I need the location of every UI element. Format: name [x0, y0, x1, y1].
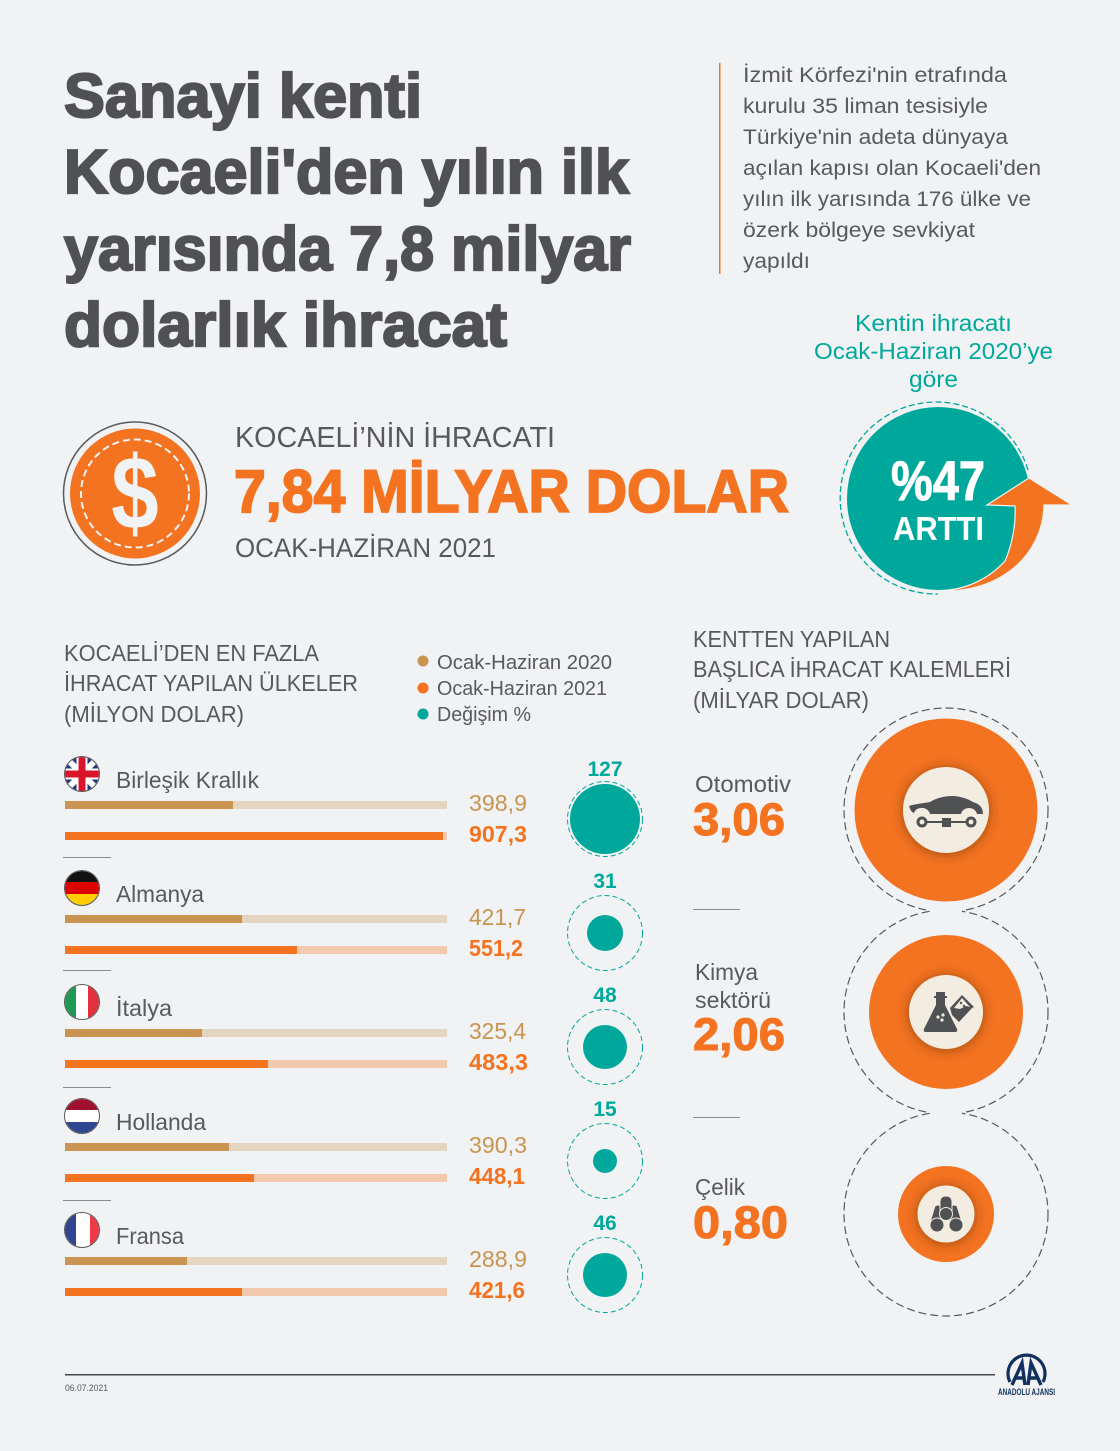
title: dolarlık ihracat: [64, 291, 507, 360]
icon: dollar coin: $: [111, 436, 159, 552]
item: Otomotiv: 3,06: [693, 794, 785, 845]
intro paragraph: İzmit Körfezi'nin etrafında: [743, 63, 1007, 87]
row: Fransa: [64, 1212, 642, 1312]
icon: Italian flag: [64, 984, 100, 1020]
item: Kimya sektörü: sektörü: [695, 987, 771, 1013]
icon: dollar coin: [64, 422, 206, 565]
row: Almanya: Almanya: [116, 881, 205, 907]
intro paragraph: yapıldı: [743, 249, 810, 273]
heading: export items: (MİLYAR DOLAR): [693, 687, 869, 713]
title: Kocaeli'den yılın ilk: [64, 138, 629, 207]
icon: French flag: [64, 1212, 100, 1248]
row: Birleşik Krallık: [64, 756, 642, 856]
icon: flask: [924, 992, 974, 1032]
callout: change caption: [814, 310, 1053, 392]
callout: change caption: Kentin ihracatı: [855, 310, 1012, 336]
intro paragraph: [719, 63, 1041, 274]
row: İtalya: [64, 984, 642, 1084]
intro paragraph: kurulu 35 liman tesisiyle: [743, 94, 988, 118]
intro paragraph: özerk bölgeye sevkiyat: [743, 218, 975, 242]
row: Almanya: 421,7: [469, 904, 526, 930]
icon: car: [909, 796, 983, 827]
icon: UK flag: [64, 756, 100, 792]
headline export figure: KOCAELİ’NİN İHRACATI: [235, 421, 555, 454]
icon: Dutch flag: [64, 1098, 100, 1134]
callout: change caption: Ocak-Haziran 2020’ye: [814, 338, 1053, 364]
intro paragraph: açılan kapısı olan Kocaeli'den: [743, 156, 1041, 180]
row: Hollanda: 15: [593, 1098, 617, 1121]
heading: countries: [64, 640, 358, 727]
row: İtalya: 325,4: [469, 1018, 526, 1044]
row: Birleşik Krallık: 907,3: [469, 821, 527, 847]
footer rule: [65, 1374, 995, 1376]
row: İtalya: İtalya: [116, 995, 173, 1021]
legend: Değişim %: [437, 703, 531, 726]
item: Kimya sektörü: Kimya: [695, 959, 759, 985]
intro paragraph: Türkiye'nin adeta dünyaya: [743, 125, 1008, 149]
item: Çelik: [693, 1166, 994, 1262]
row: Hollanda: Hollanda: [116, 1109, 207, 1135]
callout: 47 percent increase circle: [840, 402, 1072, 594]
heading: export items: KENTTEN YAPILAN: [693, 626, 890, 652]
callout: 47 percent increase circle: ARTTI: [893, 510, 984, 547]
row: Fransa: Fransa: [116, 1223, 185, 1249]
item: Otomotiv: Otomotiv: [695, 771, 791, 797]
item: Kimya sektörü: 2,06: [693, 1009, 785, 1060]
legend: Ocak-Haziran 2021: [437, 677, 607, 700]
row: Fransa: 46: [593, 1212, 617, 1235]
legend: [418, 651, 612, 726]
callout: 47 percent increase circle: %47: [891, 449, 985, 512]
callout: change caption: göre: [909, 366, 958, 392]
icon: steel pipes: [930, 1196, 963, 1232]
item: Kimya sektörü: [693, 935, 1023, 1089]
row: Almanya: [64, 870, 642, 970]
heading: countries: İHRACAT YAPILAN ÜLKELER: [64, 670, 358, 696]
row: Birleşik Krallık: 398,9: [469, 790, 527, 816]
headline export figure: [234, 421, 789, 563]
row: Hollanda: [64, 1098, 642, 1198]
item: Otomotiv: [693, 718, 1038, 902]
headline export figure: OCAK-HAZİRAN 2021: [235, 532, 496, 563]
intro paragraph: yılın ilk yarısında 176 ülke ve: [743, 187, 1031, 211]
row: Birleşik Krallık: Birleşik Krallık: [116, 767, 259, 793]
row: İtalya: 483,3: [469, 1049, 528, 1075]
icon: German flag: [64, 870, 100, 906]
title: [64, 62, 631, 360]
row: Hollanda: 448,1: [469, 1163, 525, 1189]
headline export figure: 7,84 MİLYAR DOLAR: [234, 458, 789, 525]
legend: Ocak-Haziran 2020: [437, 651, 612, 674]
row: Hollanda: 390,3: [469, 1132, 527, 1158]
arrow: [938, 478, 1072, 591]
row: Almanya: 31: [593, 870, 617, 893]
row: İtalya: 48: [593, 984, 617, 1007]
title: Sanayi kenti: [64, 62, 422, 131]
item: Çelik: 0,80: [693, 1197, 788, 1248]
item: Çelik: Çelik: [695, 1174, 745, 1200]
logo: Anadolu Ajansı: ANADOLU AJANSI: [998, 1387, 1055, 1397]
heading: export items: [693, 626, 1011, 713]
row: Birleşik Krallık: 127: [587, 758, 623, 781]
row: Almanya: 551,2: [469, 935, 523, 961]
row: Fransa: 288,9: [469, 1246, 527, 1272]
row: Fransa: 421,6: [469, 1277, 525, 1303]
title: yarısında 7,8 milyar: [64, 215, 631, 284]
heading: countries: KOCAELİ’DEN EN FAZLA: [64, 640, 319, 666]
date: 06.07.2021: [65, 1383, 108, 1394]
heading: countries: (MİLYON DOLAR): [64, 701, 244, 727]
heading: export items: BAŞLICA İHRACAT KALEMLERİ: [693, 656, 1011, 682]
logo: Anadolu Ajansı: [998, 1355, 1055, 1397]
